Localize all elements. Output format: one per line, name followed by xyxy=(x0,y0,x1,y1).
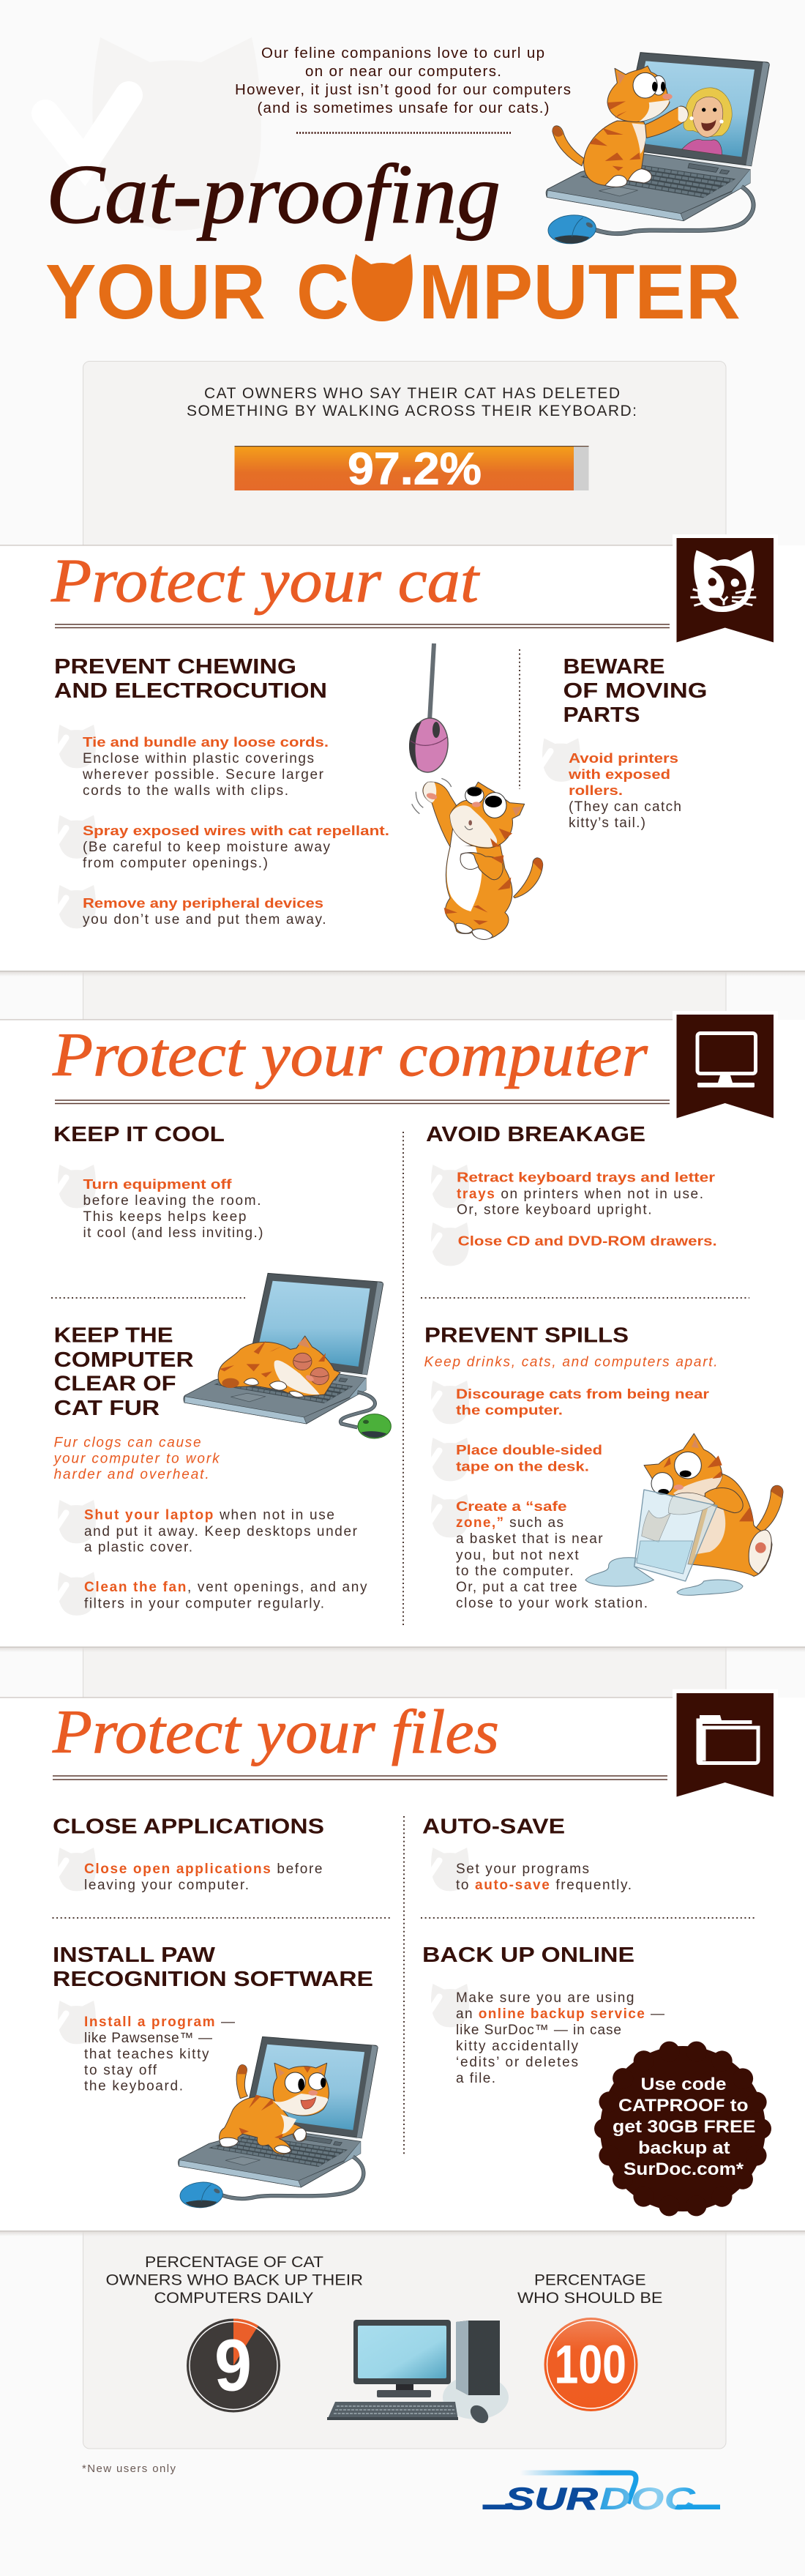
title: YOUR xyxy=(45,249,266,335)
callout badge: promo code: backup at xyxy=(638,2138,730,2158)
illustration: cat walking on laptop keyboard xyxy=(178,2036,378,2209)
illustration: cat reaching up xyxy=(412,778,543,939)
tip: set auto-save xyxy=(421,1848,632,1893)
tip: tie and bundle cords xyxy=(48,725,329,799)
section title: Protect your computer xyxy=(52,1020,648,1089)
tip: clean the fan: Clean the fan, vent openings, and any xyxy=(84,1580,367,1595)
tip: retract keyboard trays: Retract keyboard trays and letter xyxy=(457,1170,715,1184)
tip: install a program xyxy=(48,2001,235,2094)
tip: turn equipment off: Turn equipment off xyxy=(83,1176,233,1192)
tip: remove peripherals: Remove any peripheral devices xyxy=(83,895,323,911)
pie badge: 9 percent xyxy=(187,2318,280,2413)
tip: discourage cats xyxy=(421,1381,709,1424)
heading: prevent chewing: AND ELECTROCUTION xyxy=(54,679,327,703)
heading: prevent chewing: PREVENT CHEWING xyxy=(54,655,296,679)
tip: double-sided tape xyxy=(421,1438,602,1481)
ribbon with folder icon xyxy=(676,1693,774,1796)
intro text: However, it just isn’t good for our computers xyxy=(235,81,571,98)
tip: online backup service: kitty accidentally xyxy=(456,2039,578,2054)
tip: spray exposed wires: from computer openings.) xyxy=(83,856,268,871)
heading: beware of moving parts: OF MOVING xyxy=(564,679,707,703)
tip: set auto-save: Set your programs xyxy=(456,1862,589,1877)
tip: remove peripherals xyxy=(48,885,326,928)
tip: avoid printers: with exposed xyxy=(568,766,670,782)
stat panel: deleted by walking across the keyboard xyxy=(83,362,726,559)
callout badge: promo code: get 30GB FREE xyxy=(613,2117,756,2137)
tip: online backup service: ‘edits’ or deletes xyxy=(456,2055,578,2070)
title: MPUTER xyxy=(419,249,741,335)
heading: prevent spills: PREVENT SPILLS xyxy=(424,1324,629,1347)
tip: tie and bundle cords: wherever possible. Secure larger xyxy=(82,767,324,783)
tip: turn equipment off: This keeps helps keep xyxy=(83,1209,246,1225)
horizontal dividers xyxy=(51,1297,749,1299)
footnote: *New users only xyxy=(82,2463,176,2475)
tip: install a program: the keyboard. xyxy=(84,2079,183,2094)
heading: auto-save: AUTO-SAVE xyxy=(422,1815,565,1838)
ribbon with monitor icon xyxy=(676,1015,774,1119)
tip: online backup service: an online backup service — xyxy=(456,2006,664,2022)
vertical divider xyxy=(519,649,520,789)
tip: avoid printers xyxy=(532,738,681,831)
heading: keep the computer clear of cat fur xyxy=(54,1324,194,1420)
italic note: fur clogs: Fur clogs can cause xyxy=(54,1436,201,1451)
vertical divider xyxy=(403,1816,405,2154)
illustration: desktop computer xyxy=(327,2320,509,2427)
heading: install paw recognition software xyxy=(53,1944,373,1991)
italic note: fur clogs: your computer to work xyxy=(53,1451,220,1467)
panel strip between section 1 and 2 xyxy=(0,966,805,1025)
stat caption: SOMETHING BY WALKING ACROSS THEIR KEYBOARD: xyxy=(187,403,637,419)
tip: turn equipment off: it cool (and less inviting.) xyxy=(83,1225,263,1241)
heading: keep the computer clear of cat fur: KEEP THE xyxy=(54,1324,173,1347)
tip: avoid printers: Avoid printers xyxy=(569,750,678,766)
callout badge: promo code: CATPROOF to xyxy=(618,2096,748,2116)
section: Protect your computer xyxy=(0,1011,805,1648)
tip: avoid printers: kitty’s tail.) xyxy=(569,815,645,831)
pie badge: 9 percent: 9 xyxy=(214,2325,252,2407)
illustration: cat knocking over glass xyxy=(585,1433,783,1595)
heading: close applications: CLOSE APPLICATIONS xyxy=(53,1815,324,1838)
stat caption: percentage who back up daily: OWNERS WHO BACK UP THEIR xyxy=(105,2272,363,2289)
icon: ghost cat with check xyxy=(45,37,261,231)
tip: retract keyboard trays: Or, store keyboard upright. xyxy=(457,1203,651,1218)
tip: tie and bundle cords: cords to the walls with clips. xyxy=(83,783,288,799)
stat caption: percentage who back up daily: PERCENTAGE OF CAT xyxy=(145,2254,323,2271)
illustration: cat sleeping on laptop xyxy=(184,1273,391,1438)
tip: online backup service xyxy=(421,1984,664,2086)
tip: shut your laptop: Shut your laptop when not in use xyxy=(84,1507,334,1523)
tip: shut your laptop xyxy=(48,1500,358,1556)
intro text xyxy=(235,45,571,116)
heading: back up online: BACK UP ONLINE xyxy=(422,1944,634,1967)
tip: avoid printers: (They can catch xyxy=(569,799,681,815)
tip: turn equipment off xyxy=(48,1165,263,1241)
italic note: keep drinks apart: Keep drinks, cats, and computers apart. xyxy=(424,1354,717,1370)
section title: Protect your files xyxy=(52,1698,499,1766)
tip: retract keyboard trays xyxy=(421,1165,715,1218)
tip: install a program: that teaches kitty xyxy=(84,2047,209,2062)
heading: beware of moving parts xyxy=(564,655,707,727)
tip: spray exposed wires xyxy=(48,815,389,871)
progress bar 97.2% xyxy=(234,444,588,495)
illustration: cat pawing at laptop screen xyxy=(546,53,769,245)
tip: close drawers: Close CD and DVD-ROM drawers. xyxy=(458,1233,717,1249)
tip: discourage cats: the computer. xyxy=(456,1403,563,1417)
intro text: on or near our computers. xyxy=(305,63,501,80)
stat caption: percentage who back up daily xyxy=(105,2254,363,2307)
tip: avoid printers: rollers. xyxy=(569,783,623,798)
badge: 100 percent: 100 xyxy=(555,2334,626,2395)
heading: beware of moving parts: PARTS xyxy=(564,703,640,727)
heading: keep the computer clear of cat fur: CLEAR OF xyxy=(54,1372,176,1395)
heading: prevent chewing xyxy=(54,655,327,703)
heading: install paw recognition software: RECOGNITION SOFTWARE xyxy=(53,1968,373,1991)
tip: close open applications: leaving your computer. xyxy=(84,1878,249,1893)
stat caption xyxy=(187,385,637,419)
tip: online backup service: Make sure you are using xyxy=(456,1990,634,2006)
tip: install a program: to stay off xyxy=(84,2063,157,2078)
ribbon with cat icon xyxy=(676,538,774,643)
section: Protect your cat xyxy=(0,534,805,971)
vertical divider xyxy=(402,1132,404,1627)
tip: safe zone xyxy=(421,1494,648,1611)
heading: keep the computer clear of cat fur: CAT FUR xyxy=(54,1397,160,1420)
stat caption: CAT OWNERS WHO SAY THEIR CAT HAS DELETED xyxy=(204,385,620,402)
stat caption: percentage who should be: PERCENTAGE xyxy=(534,2272,645,2289)
italic note: fur clogs xyxy=(53,1436,220,1482)
illustration: dangling pink mouse xyxy=(408,643,450,774)
heading: install paw recognition software: INSTALL PAW xyxy=(53,1944,216,1967)
icon: folder xyxy=(698,1715,758,1763)
heading: keep it cool: KEEP IT COOL xyxy=(53,1123,225,1146)
callout badge: promo code xyxy=(600,2046,765,2211)
tip: tie and bundle cords: Enclose within plastic coverings xyxy=(83,751,314,766)
tip: close drawers xyxy=(421,1222,717,1266)
tip: shut your laptop: a plastic cover. xyxy=(84,1540,192,1556)
tip: close open applications xyxy=(48,1848,322,1893)
tip: double-sided tape: Place double-sided xyxy=(456,1442,602,1457)
tip: clean the fan: filters in your computer regularly. xyxy=(84,1597,324,1612)
intro text: Our feline companions love to curl up xyxy=(261,45,544,61)
tip: close open applications: Close open applications before xyxy=(84,1862,322,1877)
tip: install a program: Install a program — xyxy=(84,2015,235,2030)
title: C xyxy=(296,249,349,335)
tip: online backup service: like SurDoc™ — in case xyxy=(456,2023,621,2038)
tip: safe zone: to the computer. xyxy=(456,1564,574,1579)
tip: safe zone: close to your work station. xyxy=(456,1596,648,1611)
icon: monitor xyxy=(697,1034,755,1088)
panel strip between section 2 and 3 xyxy=(0,1640,805,1702)
horizontal dividers xyxy=(53,1917,755,1919)
panel: backup statistics background xyxy=(0,2218,805,2449)
tip: remove peripherals: you don’t use and put them away. xyxy=(83,912,326,927)
stat caption: percentage who should be: WHO SHOULD BE xyxy=(517,2290,663,2307)
italic note: fur clogs: harder and overheat. xyxy=(54,1467,209,1482)
icon: yin-yang cat xyxy=(690,550,756,612)
title xyxy=(45,148,741,335)
logo: SurDoc: SUR xyxy=(505,2482,598,2517)
tip: shut your laptop: and put it away. Keep desktops under xyxy=(84,1524,358,1539)
stat caption: percentage who should be xyxy=(517,2272,663,2307)
tip: safe zone: Or, put a cat tree xyxy=(456,1580,577,1595)
tip: retract keyboard trays: trays on printers when not in use. xyxy=(457,1187,703,1202)
tip: tie and bundle cords: Tie and bundle any loose cords. xyxy=(83,734,329,750)
callout badge: promo code: SurDoc.com* xyxy=(624,2159,744,2179)
tip: install a program: like Pawsense™ — xyxy=(84,2031,212,2046)
heading: keep the computer clear of cat fur: COMPUTER xyxy=(54,1348,194,1372)
section: Protect your files xyxy=(0,1690,805,2231)
stat caption: percentage who back up daily: COMPUTERS DAILY xyxy=(154,2290,313,2307)
badge: 100 percent xyxy=(544,2318,638,2411)
tip: spray exposed wires: Spray exposed wires with cat repellant. xyxy=(83,823,389,838)
tip: set auto-save: to auto-save frequently. xyxy=(456,1878,632,1893)
tip: clean the fan xyxy=(48,1572,367,1616)
tip: discourage cats: Discourage cats from being near xyxy=(456,1386,709,1402)
tip: safe zone: a basket that is near xyxy=(456,1531,603,1547)
tip: safe zone: zone,” such as xyxy=(456,1515,564,1531)
progress bar 97.2%: 97.2% xyxy=(348,444,482,495)
tip: safe zone: Create a “safe xyxy=(456,1498,566,1514)
tip: double-sided tape: tape on the desk. xyxy=(456,1458,589,1474)
logo: SurDoc xyxy=(483,2473,720,2517)
tip: turn equipment off: before leaving the room. xyxy=(83,1193,261,1209)
section title: Protect your cat xyxy=(50,546,481,615)
tip: spray exposed wires: (Be careful to keep moisture away xyxy=(83,840,331,855)
tip: safe zone: you, but not next xyxy=(456,1548,579,1564)
intro text: (and is sometimes unsafe for our cats.) xyxy=(258,100,549,116)
logo: SurDoc: DOC xyxy=(599,2482,696,2517)
title: Cat-proofing xyxy=(46,148,501,241)
tip: online backup service: a file. xyxy=(456,2071,495,2086)
callout badge: promo code: Use code xyxy=(641,2075,726,2094)
heading: avoid breakage: AVOID BREAKAGE xyxy=(426,1123,645,1146)
heading: beware of moving parts: BEWARE xyxy=(564,655,664,679)
